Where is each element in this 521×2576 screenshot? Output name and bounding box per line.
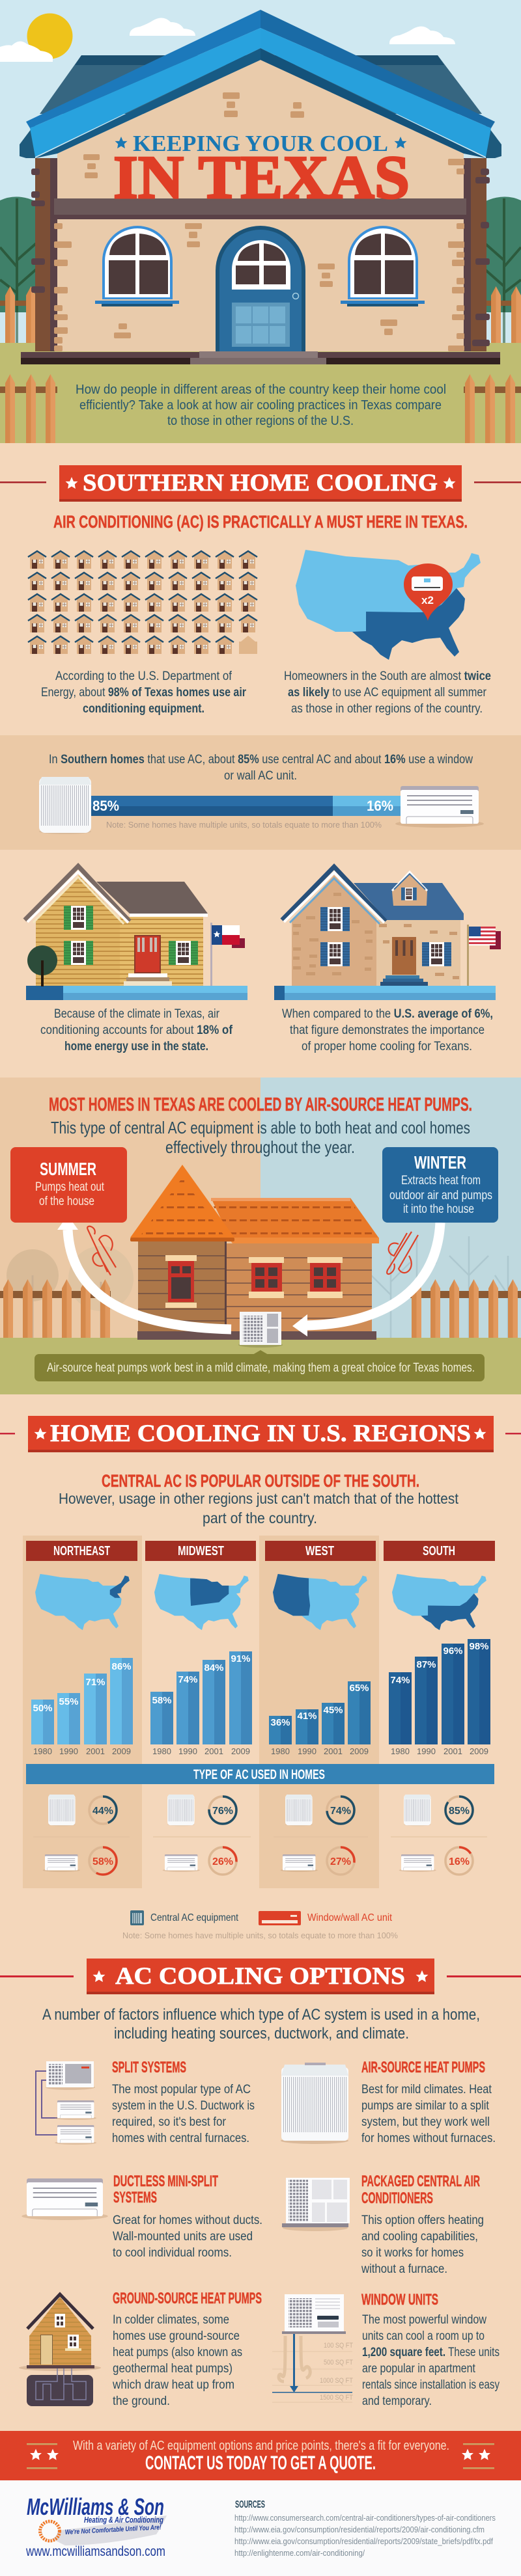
option: packaged central: and cooling capabilities, [361,2230,478,2244]
option: ductless mini-split: SYSTEMS [113,2189,157,2206]
icons: window units [43,1854,436,1872]
windows [165,1255,343,1308]
decoration: left stars [27,2443,59,2469]
bar chart: south: 2001 [444,1746,462,1756]
bar chart: midwest: 84% [204,1662,224,1674]
bar chart: west: 1980 [271,1746,290,1756]
option: ductless mini-split [21,2173,262,2260]
winter box: it into the house [403,1202,474,1216]
bar chart: south: 98% [469,1641,489,1652]
bar chart: west: 65% [349,1683,369,1694]
bar chart: midwest: 1990 [178,1746,197,1756]
call to action band: CONTACT US TODAY TO GET A QUOTE. [145,2452,376,2474]
option: ground-source: the ground. [113,2394,170,2408]
text: part of the country. [203,1510,317,1526]
legend: Note: Some homes have multiple units, so totals equate to more than 100% [122,1931,398,1940]
icon: central unit [39,777,91,834]
bar chart: south: 2009 [470,1746,488,1756]
option: air-source heat pumps [281,2059,496,2145]
text: twice as likely: as those in other regions of the country. [291,702,483,716]
region headers: MIDWEST [178,1544,224,1558]
icon: map pin x2 [404,563,453,621]
sources [234,2499,496,2558]
logo: We're Not Comfortable Until You Are! [65,2523,162,2536]
text: 98 percent [41,670,247,716]
text: 18 percent: Because of the climate in Texas, air [54,1007,220,1021]
map: northeast [35,1574,130,1630]
bar chart: south: 96% [443,1646,463,1657]
icon: window unit with range arrow: 100 SQ FT [324,2342,353,2350]
bar chart: midwest: 91% [231,1653,251,1664]
bar chart: northeast [31,1658,133,1756]
note: Note: Some homes have multiple units, so totals equate to more than 100% [106,820,382,830]
arrow: winter [292,1223,440,1336]
bar: 85 and 16 percent: 85% [92,798,119,814]
icon: heat pump unit [238,1312,283,1348]
option: window units: units can cool a room up to [362,2329,485,2343]
icon: star right [395,137,406,148]
icon: cloud right [389,26,455,44]
intro text [42,2006,480,2042]
bar chart: midwest: 74% [178,1674,198,1685]
icon: heat pump [281,2063,348,2144]
panel: southern home cooling [0,465,521,850]
option: ductless mini-split: DUCTLESS MINI-SPLIT [113,2173,218,2190]
bar chart: northeast: 71% [85,1677,106,1688]
option: air-source heat pumps: for homes without furnaces. [361,2132,496,2145]
option: ground-source [19,2290,262,2408]
illustration: yellow house with Texas flag [25,866,247,1000]
fence: upper [0,286,521,364]
icon: window unit [395,786,484,828]
donut charts: central: 44% [92,1806,113,1817]
icon: wind right [387,1232,418,1274]
text: or wall AC unit. [224,769,297,783]
bar chart: south: 1990 [417,1746,436,1756]
icon: split system [36,2061,96,2145]
ground [0,343,521,449]
option: window units [272,2291,500,2408]
summer box: of the house [39,1195,94,1208]
intro text: efficiently? Take a look at how air cooling practices in Texas compare [79,398,442,413]
icon: packaged unit [282,2178,350,2231]
region headers [26,1541,495,1561]
footer [0,2480,521,2576]
bar chart: northeast: 55% [59,1696,79,1707]
type of AC bar [26,1764,494,1784]
intro text: How do people in different areas of the country keep their home cool [76,383,446,397]
sources: http://www.eia.gov/consumption/residential/reports/2009/state_briefs/pdf/tx.pdf [234,2536,493,2546]
bar: 85 and 16 percent [89,796,401,816]
icon: window unit with range arrow: 500 SQ FT [324,2359,353,2366]
text: 18 percent: home energy use in the state. [64,1040,208,1053]
type of AC bar: TYPE OF AC USED IN HOMES [193,1767,325,1782]
option: window units: WINDOW UNITS [361,2291,438,2309]
option: ground-source: homes use ground-source [113,2329,240,2343]
option: split systems [36,2059,255,2145]
winter box: outdoor air and pumps [389,1189,492,1202]
option: packaged central: CONDITIONERS [361,2190,433,2207]
map: south highlighted [296,550,481,660]
title: KEEPING YOUR COOL [133,131,388,156]
winter box: WINTER [414,1152,466,1173]
option: ductless mini-split: to cool individual rooms. [113,2246,232,2260]
icon: map pin x2: x2 [421,594,434,606]
panel: energy use homes [25,866,501,1053]
text: twice as likely [284,670,491,716]
text: 98 percent: Energy, about 98% of Texas homes use air [41,686,247,699]
bar chart: west: 41% [297,1711,317,1722]
option: ductless mini-split: Wall-mounted units are used [113,2230,253,2244]
bar chart: northeast: 2009 [112,1746,131,1756]
intro text: to those in other regions of the U.S. [167,414,354,428]
text: 6 percent: When compared to the U.S. average of 6%, [282,1007,493,1021]
option: packaged central: so it works for homes [361,2246,464,2260]
text: 6 percent [282,1007,493,1053]
icon: sun [27,13,73,59]
panel: heat pumps [0,1078,521,1394]
house illustration [20,10,501,364]
section banner [59,465,462,502]
title: IN TEXAS [113,144,410,211]
icon: ductless unit [21,2178,108,2220]
bar chart: midwest: 1980 [152,1746,171,1756]
option: split systems: required, so it's best for [112,2115,227,2129]
bar chart: west: 1990 [298,1746,317,1756]
legend: Central AC equipment [150,1912,238,1923]
bar chart: west: 45% [323,1705,343,1716]
option: packaged central: This option offers heating [361,2214,484,2227]
bar chart: south: 74% [390,1675,410,1686]
option: ground-source: geothermal heat pumps) [113,2362,232,2376]
option: air-source heat pumps: Best for mild climates. Heat [361,2083,492,2096]
icon: Texas flag [210,923,245,986]
option: split systems: The most popular type of AC [112,2083,251,2096]
icon: US flag [467,925,501,986]
bar chart: south: 1980 [391,1746,410,1756]
summer box: Pumps heat out [35,1180,105,1194]
icon: window unit with range arrow: 1500 SQ FT [320,2394,353,2402]
option: split systems: homes with central furnaces. [112,2132,249,2145]
icon: star left [115,137,128,148]
bar chart: west [269,1681,371,1756]
fence [0,1279,521,1357]
section banner: HOME COOLING IN U.S. REGIONS [50,1420,471,1447]
bar chart: northeast: 1990 [59,1746,78,1756]
text: 18 percent: conditioning accounts for about 18% of [40,1024,233,1037]
option: packaged central: without a furnace. [361,2262,447,2276]
decoration: right stars [462,2443,494,2469]
text: 98 percent: According to the U.S. Department of [55,670,232,683]
panel: home cooling in U.S. regions [0,1416,521,1940]
summer box: SUMMER [40,1159,96,1179]
panel: AC cooling options [0,1959,521,2408]
option: air-source heat pumps: system, but they work well [361,2115,490,2129]
option: window units: are popular in apartment [362,2362,476,2376]
intro text: including heating sources, ductwork, and climate. [114,2025,409,2042]
icon: window unit with range arrow: 1000 SQ FT [320,2377,353,2385]
icons: central units [48,1795,431,1826]
legend: Window/wall AC unit [307,1912,392,1923]
text: 98 percent: conditioning equipment. [83,702,204,716]
map: west [273,1574,367,1630]
region headers: WEST [305,1544,334,1558]
website: www.mcwilliamsandson.com [25,2544,165,2559]
logo: Heating & Air Conditioning [84,2515,163,2525]
bar chart: midwest: 58% [152,1695,172,1706]
call to action band [0,2431,521,2480]
option: ground-source: In colder climates, some [113,2313,229,2327]
option: split systems: system in the U.S. Ductwork is [112,2099,255,2113]
subheading: effectively throughout the year. [165,1137,355,1157]
section banner [28,1416,494,1452]
option: ductless mini-split: Great for homes without ducts. [113,2214,262,2227]
text: However, usage in other regions just can't match that of the hottest [59,1490,459,1507]
option: air-source heat pumps: pumps are similar to a split [361,2099,490,2113]
trees [0,197,521,343]
region headers: NORTHEAST [53,1544,110,1558]
page background [0,443,521,2431]
donut charts: window: 26% [212,1856,233,1867]
window: left [95,226,179,306]
winter box [382,1147,498,1223]
text: twice as likely: as likely to use AC equipment all summer [288,686,487,699]
region headers: SOUTH [423,1544,455,1558]
icon: ground-source house [19,2294,101,2406]
bar: 85 and 16 percent: 16% [367,798,393,814]
bar chart: northeast: 2001 [86,1746,105,1756]
option: window units: and temporary. [362,2394,432,2408]
bar chart: northeast: 86% [111,1661,132,1672]
map: midwest [154,1574,249,1630]
text: 18 percent [40,1007,233,1053]
option: window units: 1,200 square feet. These units [362,2346,500,2359]
arrow: summer [57,1215,231,1329]
bar chart: midwest: 2009 [231,1746,250,1756]
section banner: AC COOLING OPTIONS [115,1963,405,1990]
icon: wind left [87,1227,116,1275]
summer box [10,1147,127,1223]
fence: lower [0,374,521,452]
donut charts: window: 16% [449,1856,470,1867]
bar chart: northeast: 1980 [33,1746,52,1756]
chart: house pictogram 98% [28,551,257,654]
sources: http://enlightenme.com/air-conditioning/ [234,2548,365,2558]
logo: McWilliams & Son [27,2493,164,2520]
donut charts: window: 58% [92,1856,113,1867]
text: 6 percent: that figure demonstrates the importance [290,1024,485,1037]
option: ground-source: GROUND-SOURCE HEAT PUMPS [113,2290,262,2307]
ground [0,1338,521,1394]
donut charts: central: 85% [449,1806,470,1817]
bar chart: west: 36% [270,1717,290,1728]
map: south [392,1574,486,1630]
icon: cloud center [130,18,195,36]
text: In Southern homes that use AC, about 85% use central AC and about 16% use a window [49,753,473,766]
option: ground-source: which draw heat up from [112,2378,234,2392]
intro text [76,383,446,428]
bar chart: west: 2009 [350,1746,369,1756]
subheading [51,1118,470,1157]
bar chart: northeast: 50% [33,1703,53,1714]
option: window units: The most powerful window [362,2313,486,2327]
winter box: Extracts heat from [401,1174,481,1187]
text [59,1490,459,1526]
bar chart: west: 2001 [324,1746,343,1756]
illustration: house with heat pump [130,1165,379,1340]
section banner [87,1959,434,1994]
donut charts: central: 74% [330,1806,351,1817]
callout [35,1350,485,1381]
bar chart: south [389,1639,490,1756]
bar chart: midwest: 2001 [204,1746,223,1756]
bar chart: south: 87% [416,1659,436,1670]
icon: cloud left [0,41,53,62]
panel: central vs window [0,735,521,850]
sources: http://www.eia.gov/consumption/residential/reports/2009/air-conditioning.cfm [234,2525,485,2534]
legend [122,1910,398,1940]
donut charts: window [89,1847,473,1875]
background trees [7,1236,508,1338]
text: twice as likely: Homeowners in the South are almost twice [284,670,491,683]
donut charts: central [89,1796,473,1824]
bar chart: midwest [150,1651,252,1756]
donut charts: window: 27% [330,1856,351,1867]
option: ground-source: heat pumps (also known as [113,2346,242,2359]
door [216,226,305,351]
illustration: stone house with US flag [274,867,501,1000]
sources: SOURCES [235,2499,265,2510]
option: packaged central [282,2173,484,2276]
logo [27,2493,167,2545]
text: 6 percent: of proper home cooling for Texans. [302,1040,472,1053]
donut charts: central: 76% [212,1806,233,1817]
section banner: SOUTHERN HOME COOLING [83,470,438,496]
option: split systems: SPLIT SYSTEMS [112,2059,186,2076]
panel: hero [0,0,521,452]
window: right [341,226,425,306]
icon: window unit with range arrow [272,2294,353,2402]
text [49,753,473,783]
